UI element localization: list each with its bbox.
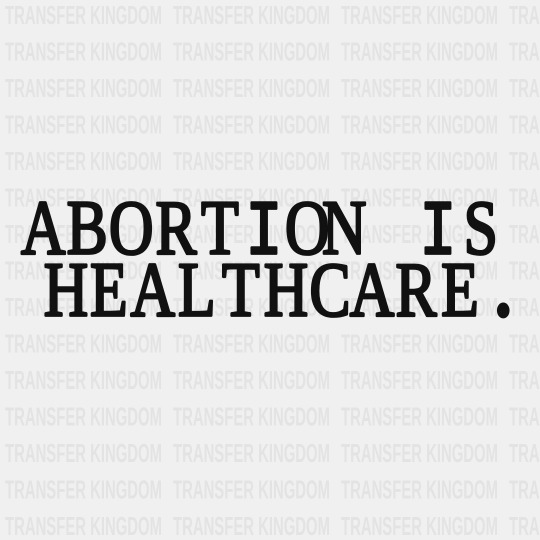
watermark pattern: TRANSFER KINGDOM [5,36,162,66]
watermark pattern: TRANSFER KINGDOM [173,256,330,286]
watermark pattern: TRANSFER KINGDOM [173,73,330,103]
watermark pattern: TRANSFER KINGDOM [5,219,162,249]
headline line 2: . [492,217,514,340]
watermark pattern: TRANSFER KINGDOM [173,365,330,395]
watermark pattern: TRANSFER KINGDOM [5,0,162,30]
headline line 1: I [246,189,282,277]
watermark pattern: TRANSFER KINGDOM [5,292,162,322]
headline line 1: ABORT [21,186,239,271]
headline line 1: S [464,186,498,271]
headline line 1: I [420,189,456,277]
headline line 2: HEALTHCARE [44,248,479,333]
watermark pattern: TRANSFER KINGDOM [5,365,162,395]
watermark pattern: TRANSFER KINGDOM [5,402,162,432]
headline [21,186,514,340]
watermark pattern: TRANSFER KINGDOM [173,292,330,322]
watermark pattern: TRANSFER KINGDOM [5,438,162,468]
watermark pattern: TRANSFER KINGDOM [5,110,162,140]
headline line 1: ON [285,186,367,271]
watermark pattern: TRANSFER KINGDOM [173,402,330,432]
watermark pattern: TRANSFER KINGDOM [173,110,330,140]
watermark pattern: TRANSFER KINGDOM [5,256,162,286]
watermark pattern: TRANSFER KINGDOM [173,182,330,212]
watermark pattern: TRANSFER KINGDOM [173,219,330,249]
watermark pattern: TRANSFER KINGDOM [173,0,330,30]
watermark pattern: TRANSFER KINGDOM [173,328,330,358]
watermark pattern: TRANSFER KINGDOM [173,146,330,176]
watermark pattern: TRANSFER KINGDOM [173,474,330,504]
watermark pattern: TRANSFER KINGDOM [5,328,162,358]
watermark pattern: TRANSFER KINGDOM [173,36,330,66]
watermark pattern: TRANSFER KINGDOM [173,438,330,468]
watermark pattern: TRANSFER KINGDOM [5,73,162,103]
watermark pattern: TRANSFER KINGDOM [5,182,162,212]
watermark pattern: TRANSFER KINGDOM [5,474,162,504]
watermark pattern: TRANSFER KINGDOM [5,146,162,176]
